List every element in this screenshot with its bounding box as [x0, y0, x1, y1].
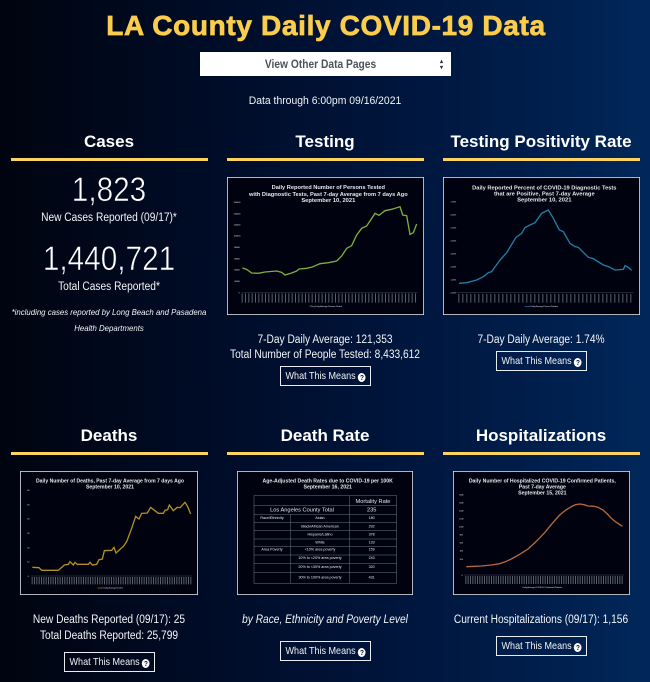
- chart: persons tested: 80000: [234, 247, 241, 249]
- chart: positivity: 4.00%: [450, 241, 456, 243]
- chart: positivity: 1.00%: [450, 280, 456, 282]
- chart: persons tested: 20000: [234, 281, 241, 283]
- table: mortality rate: Hispanic/Latino: [308, 533, 332, 537]
- panel: testing: [227, 132, 424, 386]
- button: what this means: ?: [360, 648, 364, 657]
- table: mortality rate: Age-Adjusted Death Rates due to COVID-19 per 100K: [262, 478, 393, 484]
- chart: hospitalizations: Daily Average COVID-19 Confirmed Patients: [523, 586, 562, 589]
- total cases label: Total Cases Reported*: [58, 281, 160, 293]
- chart: persons tested: Daily Reported Number of Persons Tested: [272, 185, 385, 191]
- panel: deaths: [11, 426, 208, 672]
- chart: positivity: 3.00%: [450, 254, 456, 256]
- button: what this means: [496, 351, 587, 371]
- divider: hospitalizations: [443, 452, 640, 455]
- chart: deaths: September 10, 2021: [86, 484, 134, 490]
- panel: cases: [11, 132, 208, 333]
- title: LA County Daily COVID-19 Data: [106, 10, 546, 41]
- chart: hospitalizations: 1800: [459, 494, 464, 496]
- chart: positivity: Daily Average Percent Positive: [531, 305, 559, 308]
- table: mortality rate: 243: [369, 556, 375, 560]
- table: mortality rate: White: [315, 541, 325, 545]
- chart: deaths: 40: [27, 519, 30, 521]
- panel: death rate: [227, 426, 424, 661]
- divider: cases: [11, 158, 208, 161]
- panel: testing positivity rate: [443, 132, 640, 371]
- testing stats: 7-Day Daily Average: 121,353: [257, 334, 393, 346]
- chart: positivity: Daily Reported Percent of COVID-19 Diagnostic Tests: [472, 185, 617, 191]
- deaths stats: Total Deaths Reported: 25,799: [40, 630, 178, 642]
- chart: hospitalizations: 1200: [459, 518, 464, 520]
- chart: hospitalizations: 800: [460, 535, 464, 537]
- chart: hospitalizations: 400: [460, 551, 464, 553]
- positivity stat: 7-Day Daily Average: 1.74%: [477, 334, 605, 346]
- table: mortality rate: 30% to 100% area poverty: [298, 576, 342, 580]
- testing stats: [230, 334, 420, 361]
- new cases label: New Cases Reported (09/17)*: [41, 212, 177, 224]
- chart: positivity: 0.00%: [450, 292, 456, 294]
- heading: hospitalizations: Hospitalizations: [476, 426, 606, 445]
- button: what this means: [496, 636, 587, 656]
- chart: deaths: 30: [27, 533, 30, 535]
- hospitalizations stat: Current Hospitalizations (09/17): 1,156: [454, 614, 628, 626]
- table: mortality rate: Black/African American: [301, 524, 339, 528]
- dropdown: view other data pages: ▴: [440, 59, 443, 65]
- chart: deaths: 0: [28, 576, 30, 578]
- heading: testing: Testing: [295, 132, 355, 151]
- table: mortality rate: September 16, 2021: [304, 484, 352, 490]
- button: what this means: [280, 366, 371, 386]
- button: what this means: What This Means: [285, 370, 355, 382]
- table: mortality rate: <10% area poverty: [305, 548, 336, 552]
- chart: persons tested: 60000: [234, 258, 241, 260]
- table: mortality rate: Race/Ethnicity: [260, 516, 284, 520]
- chart: persons tested: 120000: [234, 225, 241, 227]
- button: what this means: [280, 641, 371, 661]
- chart: persons tested: September 10, 2021: [301, 198, 355, 204]
- table: mortality rate: Asian: [315, 516, 325, 520]
- dropdown: view other data pages: [200, 52, 451, 76]
- chart: persons tested: with Diagnostic Tests, Past 7-day Average from 7 days Ago: [248, 192, 408, 198]
- chart: hospitalizations: [453, 471, 630, 595]
- chart: persons tested: 160000: [234, 202, 241, 204]
- heading: death rate: Death Rate: [281, 426, 369, 445]
- divider: deaths: [11, 452, 208, 455]
- testing stats: Total Number of People Tested: 8,433,612: [230, 349, 420, 361]
- chart: hospitalizations: 1400: [459, 510, 464, 512]
- table: mortality rate: 431: [369, 576, 375, 580]
- table: mortality rate: [237, 471, 413, 595]
- button: what this means: What This Means: [285, 645, 355, 657]
- button: what this means: ?: [576, 358, 580, 367]
- chart: positivity: 2.00%: [450, 267, 456, 269]
- table: mortality rate: 159: [369, 548, 375, 552]
- chart: hospitalizations: 1000: [459, 527, 464, 529]
- table: mortality rate: Los Angeles County Total: [270, 508, 334, 514]
- table: mortality rate: 320: [369, 565, 375, 569]
- heading: cases: Cases: [84, 132, 134, 151]
- chart: positivity: that are Positive, Past 7-day Average: [494, 192, 595, 198]
- chart: hospitalizations: 0: [461, 575, 463, 577]
- chart: positivity: 6.00%: [450, 215, 456, 217]
- chart: hospitalizations: 200: [460, 559, 464, 561]
- deaths stats: New Deaths Reported (09/17): 25: [33, 614, 185, 626]
- dropdown: view other data pages: View Other Data Pages: [265, 59, 376, 71]
- chart: deaths: [20, 471, 198, 595]
- footnote: [12, 307, 206, 333]
- chart: persons tested: 0: [238, 292, 240, 294]
- footnote: Health Departments: [74, 323, 144, 333]
- table: mortality rate: 133: [369, 541, 375, 545]
- table: mortality rate: 235: [367, 508, 376, 514]
- button: what this means: ?: [144, 659, 148, 668]
- chart: persons tested: 7-Day Daily Average Persons Tested: [309, 305, 342, 308]
- divider: death rate: [227, 452, 424, 455]
- button: what this means: What This Means: [501, 640, 571, 652]
- chart: hospitalizations: September 15, 2021: [518, 491, 567, 497]
- dropdown: view other data pages: ▾: [440, 65, 443, 71]
- button: what this means: ?: [360, 373, 364, 382]
- chart: deaths: Daily Number of Deaths, Past 7-day Average from 7 days Ago: [36, 478, 184, 484]
- total cases number: 1,440,721: [43, 240, 175, 278]
- table: mortality rate: Area Poverty: [261, 548, 283, 552]
- table: mortality rate: 180: [369, 516, 375, 520]
- table: mortality rate: 378: [369, 533, 375, 537]
- heading: testing positivity rate: Testing Positivity Rate: [450, 132, 632, 151]
- table: mortality rate: 20% to <30% area poverty: [298, 565, 342, 569]
- chart: persons tested: 140000: [234, 213, 241, 215]
- chart: persons tested: 40000: [234, 270, 241, 272]
- chart: positivity: [443, 177, 640, 315]
- chart: deaths: 60: [27, 490, 30, 492]
- button: what this means: [64, 652, 155, 672]
- chart: positivity: 7.00%: [450, 202, 456, 204]
- chart: deaths: Daily Average Deaths: [104, 587, 123, 590]
- death rate note: by Race, Ethnicity and Poverty Level: [242, 614, 408, 626]
- date line: Data through 6:00pm 09/16/2021: [249, 95, 401, 107]
- panel: hospitalizations: [443, 426, 640, 656]
- table: mortality rate: Mortality Rate: [356, 499, 390, 505]
- chart: deaths: 20: [27, 547, 30, 549]
- chart: deaths: 50: [27, 504, 30, 506]
- chart: hospitalizations: 600: [460, 543, 464, 545]
- chart: persons tested: 100000: [234, 236, 241, 238]
- deaths stats: [33, 614, 185, 642]
- chart: hospitalizations: Past 7-day Average: [519, 484, 566, 490]
- footnote: *including cases reported by Long Beach and Pasadena: [12, 307, 206, 317]
- new cases number: 1,823: [72, 171, 146, 209]
- button: what this means: What This Means: [501, 355, 571, 367]
- chart: persons tested: [227, 177, 424, 315]
- chart: deaths: 10: [27, 562, 30, 564]
- table: mortality rate: 292: [369, 524, 375, 528]
- chart: hospitalizations: Daily Number of Hospitalized COVID-19 Confirmed Patients,: [469, 478, 616, 484]
- chart: positivity: September 10, 2021: [517, 198, 572, 204]
- button: what this means: ?: [576, 643, 580, 652]
- button: what this means: What This Means: [69, 656, 139, 668]
- divider: positivity: [443, 158, 640, 161]
- table: mortality rate: 10% to <20% area poverty: [298, 556, 342, 560]
- heading: deaths: Deaths: [81, 426, 137, 445]
- divider: testing: [227, 158, 424, 161]
- chart: positivity: 5.00%: [450, 228, 456, 230]
- chart: hospitalizations: 1600: [459, 502, 464, 504]
